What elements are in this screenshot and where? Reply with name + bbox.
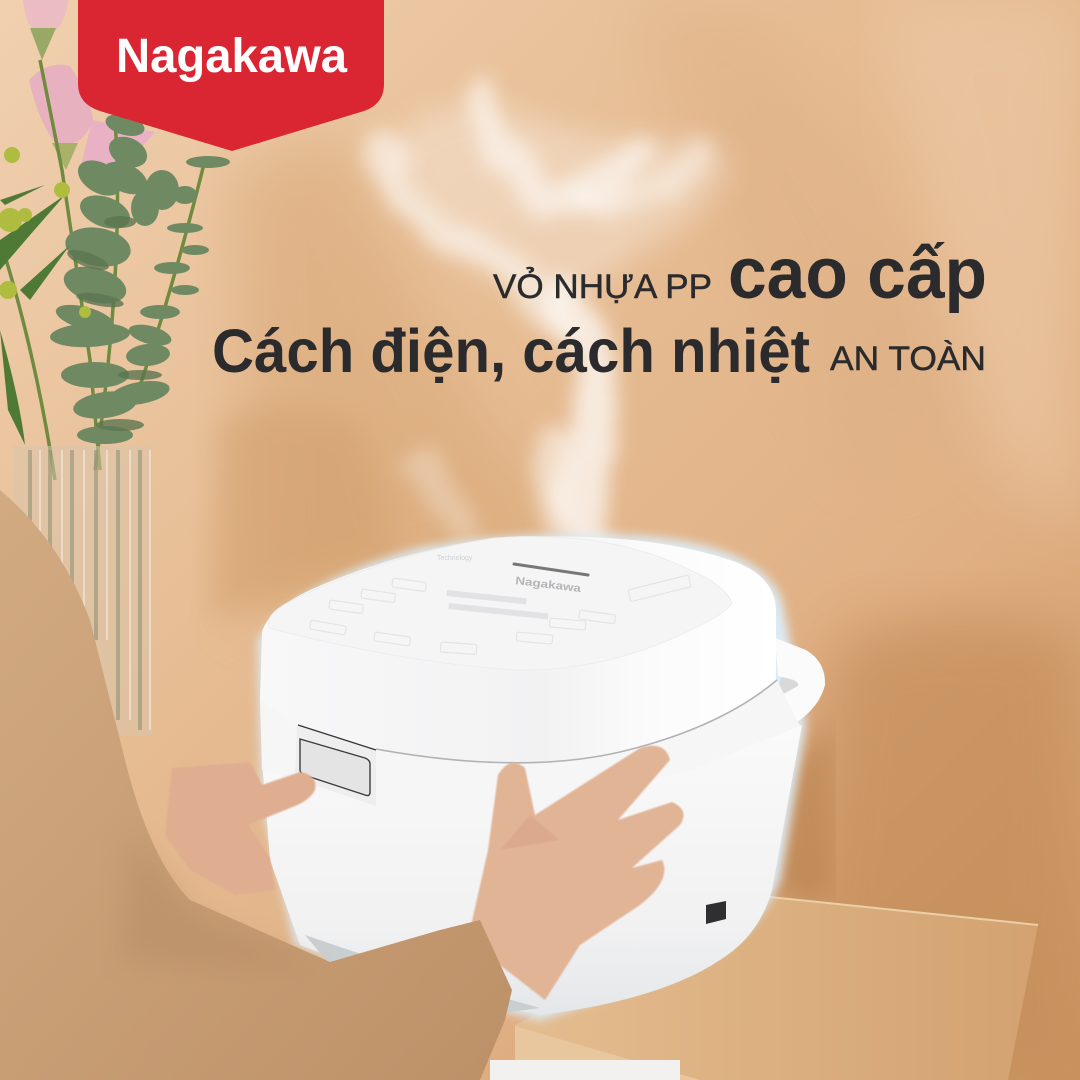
eucalyptus leaves <box>49 110 230 444</box>
headline line one: VỎ NHỰA PP <box>493 268 712 306</box>
hands and sleeve <box>0 490 684 1080</box>
plant in glass vase <box>0 0 230 736</box>
headline line one <box>493 234 987 314</box>
headline line two: Cách điện, cách nhiệt <box>212 317 810 385</box>
wooden box <box>490 897 1038 1080</box>
front hand <box>470 746 684 1000</box>
steam vent <box>514 564 588 575</box>
glass vase <box>14 446 152 736</box>
seam line <box>376 680 777 763</box>
display digits <box>446 590 548 619</box>
lid panel <box>269 537 732 670</box>
lock button <box>295 725 376 806</box>
lower body <box>262 725 802 1015</box>
base shadow <box>305 935 540 1012</box>
steam rising from the cooker <box>380 100 730 540</box>
headline line two: AN TOÀN <box>830 340 986 378</box>
rice cooker <box>258 534 825 1020</box>
rice cooker: Technology <box>437 555 473 562</box>
outer upper shell <box>260 536 776 763</box>
brand name: Nagakawa <box>116 30 347 83</box>
sleeve <box>0 490 512 1080</box>
side band <box>260 680 800 823</box>
back hand <box>165 762 315 895</box>
touch keys <box>309 575 691 654</box>
power socket <box>706 901 726 924</box>
handle <box>686 638 825 775</box>
headline line one: cao cấp <box>728 234 987 314</box>
headline <box>212 234 987 385</box>
green leaves <box>0 185 70 445</box>
glow outline <box>258 534 806 1020</box>
stems <box>0 60 205 480</box>
logo badge <box>78 0 384 151</box>
flowers <box>23 0 155 172</box>
lid branding: Nagakawa <box>515 575 583 595</box>
